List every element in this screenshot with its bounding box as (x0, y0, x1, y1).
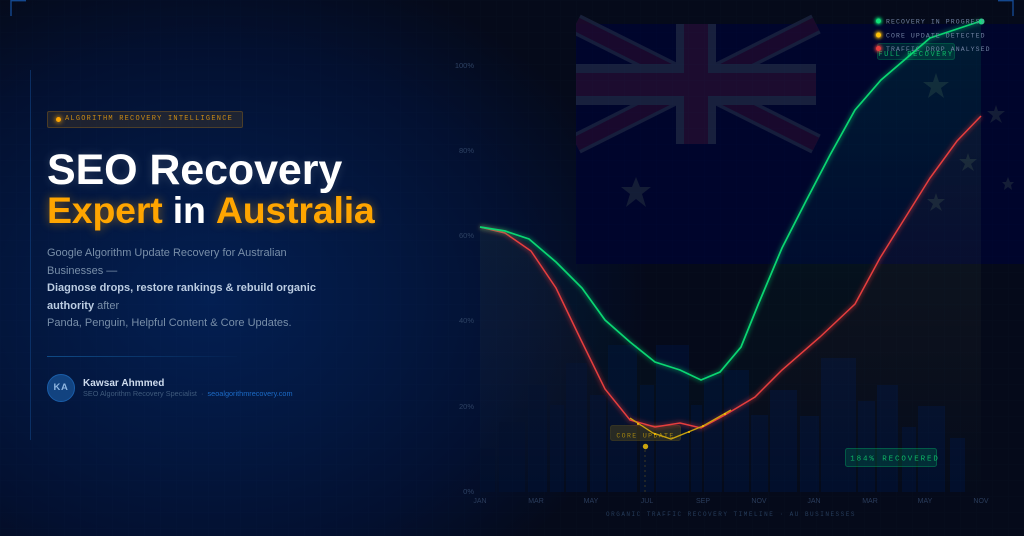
184% recovered label (846, 448, 940, 466)
x axis labels: NOV (973, 498, 989, 505)
x axis labels: MAY (918, 498, 933, 505)
legend: TRAFFIC DROP ANALYSED (886, 46, 991, 53)
x axis labels: NOV (751, 498, 767, 505)
title: SEO Recovery (47, 146, 342, 194)
avatar: KA (54, 382, 68, 393)
184% recovered label: 184% RECOVERED (850, 456, 940, 464)
x axis labels: JAN (473, 498, 487, 505)
legend: CORE UPDATE DETECTED (886, 32, 986, 40)
chart: area fills (480, 21, 981, 492)
full recovery label: FULL RECOVERY (878, 51, 954, 59)
left accent line (30, 70, 31, 440)
recovery line: red traffic drop (480, 116, 981, 428)
y axis labels: 100% (455, 61, 474, 70)
y axis labels: 80% (459, 146, 474, 155)
description text (47, 247, 316, 329)
x axis labels (473, 498, 989, 505)
bar chart: background traffic bars (480, 345, 965, 492)
flag: Australian flag watermark (576, 24, 1024, 264)
x axis labels: MAY (584, 498, 599, 505)
legend (875, 18, 991, 53)
axis title: ORGANIC TRAFFIC RECOVERY TIMELINE · AU BUSINESSES (606, 511, 856, 518)
avatar (47, 374, 75, 402)
title: Expert in Australia (47, 189, 375, 231)
core update label: CORE UPDATE (616, 432, 675, 440)
y axis labels: 20% (459, 402, 474, 411)
description text: authority after (47, 300, 119, 312)
full recovery label (878, 44, 954, 60)
y axis labels: 60% (459, 231, 474, 240)
y axis labels: 40% (459, 316, 474, 325)
recovery line: green (480, 21, 981, 380)
badge: ALGORITHM RECOVERY INTELLIGENCE (65, 115, 233, 123)
description text: Google Algorithm Update Recovery for Australian (47, 247, 287, 259)
end point dot (978, 18, 984, 24)
x axis labels: JAN (807, 498, 821, 505)
core update line: yellow (630, 410, 731, 439)
corner brackets (11, 1, 1013, 16)
y axis labels (455, 61, 474, 496)
core update dot (643, 444, 648, 449)
description text: Panda, Penguin, Helpful Content & Core Updates. (47, 317, 292, 329)
icon: flag stars (621, 73, 1014, 211)
badge (47, 111, 243, 128)
core update marker line (644, 450, 646, 492)
author name: Kawsar Ahmmed (83, 378, 164, 389)
left background glow (0, 0, 660, 536)
author role and website: SEO Algorithm Recovery Specialist · seoalgorithmrecovery.com (83, 389, 293, 398)
x axis labels: MAR (528, 498, 544, 505)
x axis labels: SEP (696, 498, 710, 505)
x axis labels: JUL (641, 498, 653, 505)
description text: Businesses — (47, 265, 117, 277)
title (43, 146, 380, 234)
core update label (610, 426, 680, 440)
x axis labels: MAR (862, 498, 878, 505)
y axis labels: 0% (463, 487, 474, 496)
description text: Diagnose drops, restore rankings & rebuild organic (47, 282, 316, 294)
legend: RECOVERY IN PROGRESS (886, 18, 986, 26)
